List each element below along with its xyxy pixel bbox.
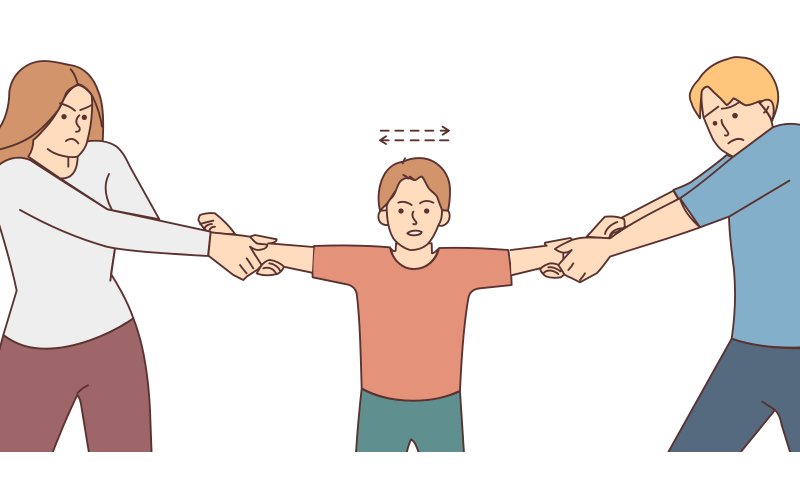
man shirt fold line <box>729 181 789 217</box>
woman <box>0 61 313 455</box>
woman pants crease <box>77 385 88 393</box>
child <box>312 158 512 453</box>
man back forearm <box>622 191 678 228</box>
man shirt <box>680 124 800 348</box>
child face features <box>398 158 433 235</box>
direction arrows <box>380 127 449 144</box>
man <box>511 57 800 455</box>
man face <box>701 87 773 157</box>
woman hair overlap lines <box>0 69 102 167</box>
woman face and neck <box>28 85 92 178</box>
man hand finger lines <box>568 263 585 280</box>
woman front hand <box>208 232 267 280</box>
woman pants <box>0 318 152 455</box>
woman long hair <box>0 61 103 165</box>
child shorts <box>356 389 464 453</box>
man pants <box>667 339 800 455</box>
child hair <box>379 158 450 211</box>
child left arm and hand <box>250 235 313 275</box>
man face features <box>705 102 768 143</box>
illustration: parents pulling a child in opposite directions <box>0 56 800 452</box>
woman back hand <box>198 213 235 234</box>
man back arm sleeve <box>672 154 732 198</box>
child neck <box>391 243 439 269</box>
child right arm and hand <box>511 238 572 278</box>
man front arm and hand <box>555 198 700 282</box>
man pants crease <box>762 402 775 410</box>
child head <box>378 158 450 250</box>
man ear <box>760 100 774 121</box>
child face <box>387 177 442 250</box>
man back hand <box>587 216 625 238</box>
child t-shirt <box>312 245 512 401</box>
woman sweater front and arm <box>0 158 211 349</box>
woman sweater back <box>60 141 159 219</box>
woman sweater fold lines <box>20 174 115 281</box>
child ears <box>378 210 450 226</box>
man hair <box>690 57 778 122</box>
woman face features <box>60 103 92 143</box>
